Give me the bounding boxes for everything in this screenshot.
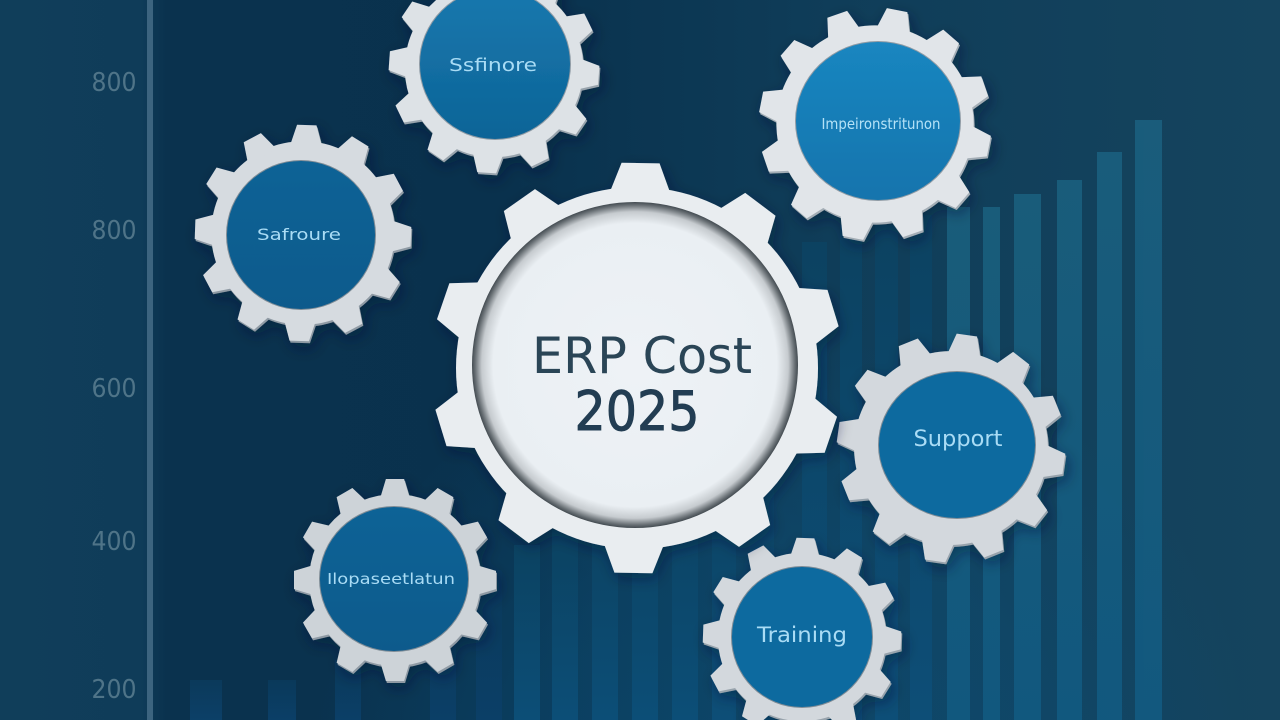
gear: top software (382, 0, 607, 182)
gear: support (822, 319, 1081, 579)
central title (532, 327, 752, 443)
title line: 2025: 2025 (574, 380, 700, 443)
gear: bottom left implementation (294, 479, 497, 683)
gear: training (701, 535, 905, 720)
axis label 600: 600 (92, 374, 136, 404)
central disc (472, 202, 798, 528)
axis label 200: 200 (92, 675, 136, 705)
label: bottom left gear: Ilopaseetlatun (327, 570, 455, 588)
axis label 400: 400 (92, 527, 136, 557)
gear: left software (191, 121, 416, 347)
label: left gear: Safroure (257, 225, 341, 244)
central gear (432, 163, 842, 573)
label: support gear: Support (914, 427, 1003, 452)
lower glow behind bars (300, 320, 1260, 720)
bar chart (190, 120, 1162, 720)
label: upper right gear: Impeironstritunon (822, 115, 940, 133)
axis labels (92, 68, 136, 705)
axis label 800: 800 (92, 216, 136, 246)
label: training gear: Training (756, 623, 847, 647)
gear: upper right implementation (739, 0, 1012, 262)
axis label 800 top: 800 (92, 68, 136, 98)
chart axis line (147, 0, 153, 720)
title line: ERP Cost: ERP Cost (532, 327, 752, 385)
label: top gear: Ssfinore (449, 55, 537, 76)
